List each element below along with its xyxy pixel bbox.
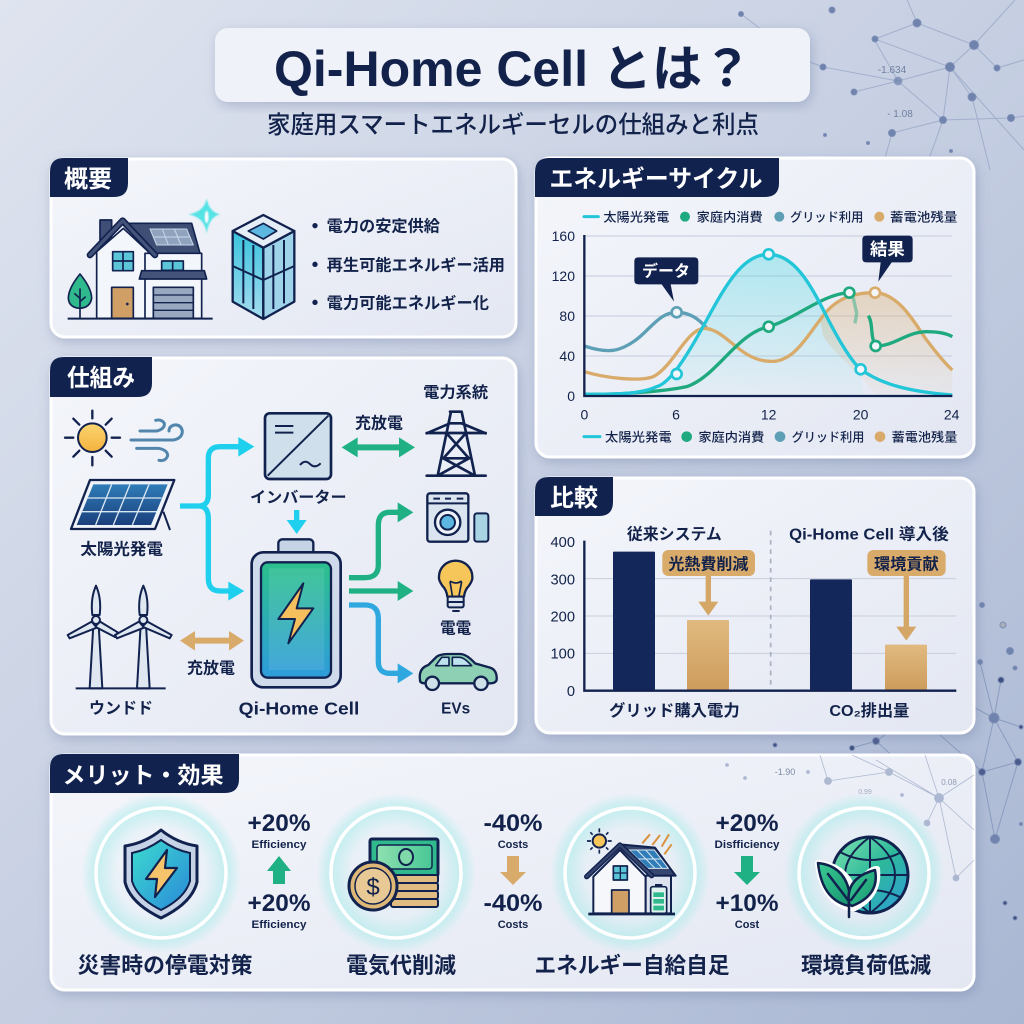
benefit: outage protection xyxy=(78,793,252,978)
stats: disfficiency and cost xyxy=(714,810,780,931)
icon: light bulb xyxy=(439,561,472,611)
heading: メリット・効果 xyxy=(50,754,239,793)
column heading: Qi-Home Cell 導入後: Qi-Home Cell 導入後 xyxy=(789,524,949,543)
bars: grid purchased power xyxy=(613,552,729,690)
heading: エネルギーサイクル: エネルギーサイクル xyxy=(550,166,762,193)
top legend: グリッド利用 xyxy=(790,209,863,224)
overview artwork and bullets xyxy=(68,198,505,319)
x axis labels xyxy=(580,406,960,422)
stats: costs: -40% xyxy=(484,810,542,837)
benefit: lower environmental load xyxy=(784,793,944,978)
panel: comparison 比較 xyxy=(535,477,974,733)
y axis labels: 0 xyxy=(567,684,575,700)
label: 充放電 (grid): 充放電 xyxy=(355,414,403,432)
stats: efficiency: Efficiency xyxy=(252,839,307,851)
bottom legend: 蓄電池残量 xyxy=(892,430,958,445)
callout: 結果 xyxy=(862,236,913,282)
top legend: 家庭内消費 xyxy=(697,209,763,224)
x axis labels: 24 xyxy=(944,406,960,422)
stats: costs: Costs xyxy=(498,919,528,931)
arrow: inverter to battery xyxy=(287,510,307,534)
bullet list xyxy=(312,217,505,312)
title box xyxy=(215,28,810,102)
y axis labels: 300 xyxy=(551,572,575,588)
small number: -1.90: -1.90 xyxy=(775,767,795,777)
stats: disfficiency and cost: +10% xyxy=(716,890,778,917)
stats: costs: Costs xyxy=(498,839,528,851)
subtitle: 家庭用スマートエネルギーセルの仕組みと利点 xyxy=(267,111,759,139)
series: household consumption xyxy=(584,293,952,394)
area fills xyxy=(657,254,952,395)
heading: エネルギーサイクル xyxy=(535,158,779,197)
benefit: energy self-sufficiency xyxy=(534,793,730,978)
bottom legend xyxy=(584,430,958,445)
bottom legend: 太陽光発電 xyxy=(605,430,672,445)
stats: disfficiency and cost: +20% xyxy=(716,810,778,837)
heading: 比較 xyxy=(535,477,613,516)
label: インバーター: インバーター xyxy=(250,489,347,506)
stats: costs: -40% xyxy=(484,890,542,917)
heading: 概要 xyxy=(50,158,128,197)
y axis labels: 120 xyxy=(552,268,575,284)
y axis labels: 0 xyxy=(567,388,575,404)
label: 電気代削減: 電気代削減 xyxy=(346,953,456,978)
x axis labels: 0 xyxy=(580,406,588,422)
axis label: CO2排出量: CO₂排出量 xyxy=(829,702,909,720)
arrow: wind to battery xyxy=(180,631,244,651)
series: grid usage xyxy=(584,312,707,351)
stats: disfficiency and cost: Cost xyxy=(735,919,760,931)
background number: -1.08: - 1.08 xyxy=(887,109,913,120)
callout: データ: データ xyxy=(642,262,690,281)
top legend xyxy=(584,209,958,224)
bottom legend: 家庭内消費 xyxy=(698,430,765,445)
faint network over panel xyxy=(726,755,974,881)
icon: globe with leaves ring xyxy=(784,793,944,953)
stats: efficiency: +20% xyxy=(248,890,310,917)
y axis labels xyxy=(551,535,575,700)
icon: solar panel xyxy=(71,480,174,530)
label: エネルギー自給自足: エネルギー自給自足 xyxy=(534,953,730,978)
y axis labels: 80 xyxy=(559,308,575,324)
heading: 比較: 比較 xyxy=(550,485,598,512)
icon: battery Qi-Home Cell xyxy=(252,539,341,687)
small number: 0.08: 0.08 xyxy=(941,778,957,787)
stats: efficiency xyxy=(248,810,310,931)
y axis labels: 400 xyxy=(551,535,575,551)
heading: 仕組み xyxy=(50,357,152,397)
label: 充放電 (wind): 充放電 xyxy=(187,659,235,677)
callout: 光熱費削減: 光熱費削減 xyxy=(668,555,748,573)
icon: home ring xyxy=(550,793,710,953)
x axis labels: 6 xyxy=(672,406,680,422)
icon: wind turbines xyxy=(68,586,172,688)
callout: 光熱費削減 xyxy=(662,550,755,616)
icon: money ring xyxy=(316,793,476,953)
arrow: inverter to grid xyxy=(342,437,415,457)
label: 災害時の停電対策: 災害時の停電対策 xyxy=(78,953,252,978)
callout: 環境貢献: 環境貢献 xyxy=(874,555,939,573)
label: 環境負荷低減: 環境負荷低減 xyxy=(801,953,931,978)
icon: washing machine and phone xyxy=(427,493,488,542)
series: battery level xyxy=(584,293,952,379)
series: solar generation xyxy=(584,254,952,395)
callout: データ xyxy=(634,257,698,302)
heading: メリット・効果: メリット・効果 xyxy=(62,762,224,788)
top legend: 蓄電池残量 xyxy=(890,209,958,224)
column heading: 従来システム: 従来システム xyxy=(627,525,722,543)
heading: 概要: 概要 xyxy=(64,166,112,193)
callout: 結果: 結果 xyxy=(870,239,905,259)
y axis labels xyxy=(552,228,575,404)
data point markers xyxy=(672,249,881,379)
y axis labels: 100 xyxy=(551,647,575,663)
background number: -1.634: -1.634 xyxy=(878,65,907,76)
heading: 仕組み: 仕組み xyxy=(67,365,135,392)
icon: power tower xyxy=(427,412,486,476)
arrows: solar to inverter and battery xyxy=(180,437,254,601)
stats: costs xyxy=(484,810,542,931)
icon: wind xyxy=(131,420,182,461)
x axis labels: 20 xyxy=(853,406,869,422)
panel: energy cycle エネルギーサイクル xyxy=(535,158,974,457)
label: ウンドド: ウンドド xyxy=(89,699,153,717)
icon: smart house xyxy=(68,220,213,319)
label: 電力系統: 電力系統 xyxy=(423,384,489,402)
x axis labels: 12 xyxy=(761,406,777,422)
stats: efficiency: Efficiency xyxy=(252,919,307,931)
bullet list: 電力の安定供給 xyxy=(327,217,440,236)
panel: how it works 仕組み xyxy=(50,357,516,734)
bars: CO2 emissions xyxy=(810,579,927,690)
benefit: lower electricity bill xyxy=(316,793,476,978)
icon: money ring: $ xyxy=(366,874,380,901)
arrows: battery to appliances xyxy=(349,502,413,683)
bullet list: 電力可能エネルギー化 xyxy=(327,293,489,312)
label: EVs: EVs xyxy=(441,700,470,717)
line chart xyxy=(552,209,960,445)
icon: electric vehicle xyxy=(420,654,497,690)
icon: energy cell cube xyxy=(233,215,294,319)
y axis labels: 160 xyxy=(552,228,575,244)
panel: benefits メリット・効果 xyxy=(50,754,974,990)
callout: 環境貢献 xyxy=(867,550,946,641)
icon: shield ring xyxy=(81,793,241,953)
y axis labels: 200 xyxy=(551,609,575,625)
stats: efficiency: +20% xyxy=(248,810,310,837)
background network decoration: top right xyxy=(738,0,1024,170)
small number: 0.99: 0.99 xyxy=(858,789,872,796)
background network decoration: lower right xyxy=(773,602,1023,920)
panel: overview 概要 xyxy=(50,158,516,337)
label: 電電: 電電 xyxy=(440,619,472,637)
system diagram xyxy=(65,384,497,718)
bar chart xyxy=(551,524,956,720)
label: Qi-Home Cell: Qi-Home Cell xyxy=(239,698,359,718)
bullet list: 再生可能エネルギー活用 xyxy=(327,255,505,274)
title text: Qi-Home Cell とは？ xyxy=(274,41,752,97)
icon: sparkle xyxy=(188,198,220,233)
label: 太陽光発電: 太陽光発電 xyxy=(80,540,163,558)
top legend: 太陽光発電 xyxy=(603,209,670,224)
icon: inverter xyxy=(265,413,331,479)
stats: disfficiency and cost: Disfficiency xyxy=(714,839,780,851)
y axis labels: 40 xyxy=(559,348,575,364)
axis label: グリッド購入電力: グリッド購入電力 xyxy=(609,701,740,720)
bottom legend: グリッド利用 xyxy=(792,430,864,445)
icon: sun xyxy=(65,411,120,465)
